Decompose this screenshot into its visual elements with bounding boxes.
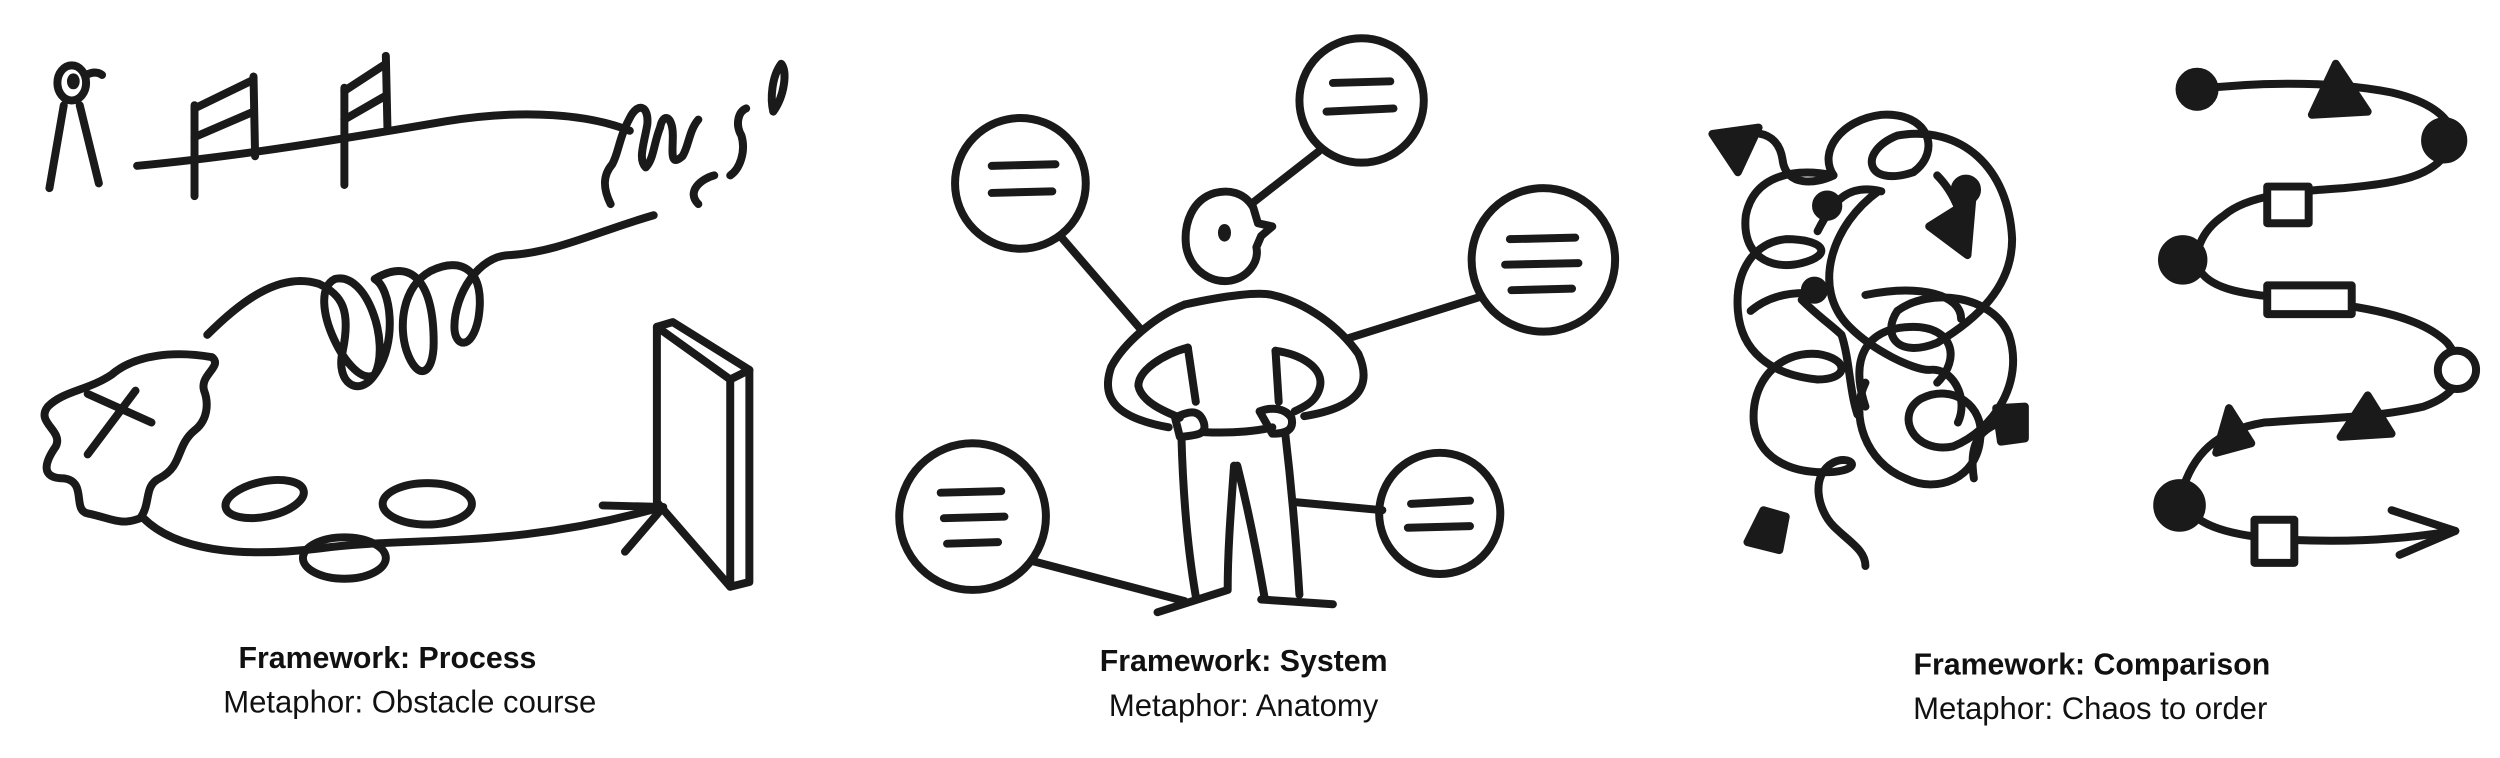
icon: chaos scribble	[1722, 115, 2013, 566]
heading: system: Framework: System	[1100, 645, 1388, 678]
connectors	[1033, 151, 1481, 601]
icon: circle bottom-right	[1379, 453, 1500, 574]
icon: order path with arrow	[2181, 84, 2476, 563]
icon: circle bottom-left	[899, 443, 1046, 590]
icon: circle top	[1299, 38, 1424, 163]
panel: process obstacle course	[45, 56, 785, 587]
heading: system	[1100, 645, 1388, 723]
icon: map blob with X	[45, 354, 215, 522]
icon: flames	[605, 64, 785, 204]
heading: process: Metaphor: Obstacle course	[223, 685, 596, 720]
heading: process	[223, 642, 596, 720]
icon: hurdles	[195, 56, 387, 196]
panel: system anatomy	[899, 38, 1615, 612]
arrow: course path	[143, 507, 662, 552]
icon: circle right	[1472, 188, 1615, 332]
icon: wall	[657, 322, 749, 587]
heading: comparison	[1913, 648, 2270, 726]
heading: process: Framework: Process	[238, 642, 536, 675]
icon: stick figure	[49, 65, 102, 188]
heading: system: Metaphor: Anatomy	[1109, 688, 1379, 723]
icon: chaos shapes	[1712, 128, 2025, 550]
icon: stepping stones	[222, 474, 472, 579]
icon: circle left	[955, 118, 1086, 249]
icon: order shapes filled	[2157, 64, 2463, 528]
hurdle track line	[137, 114, 630, 166]
panel: comparison chaos to order	[1712, 64, 2476, 566]
heading: comparison: Metaphor: Chaos to order	[1913, 691, 2267, 726]
heading: comparison: Framework: Comparison	[1913, 648, 2270, 681]
icon: spring loops path	[207, 215, 654, 386]
icon: person	[1108, 192, 1364, 612]
